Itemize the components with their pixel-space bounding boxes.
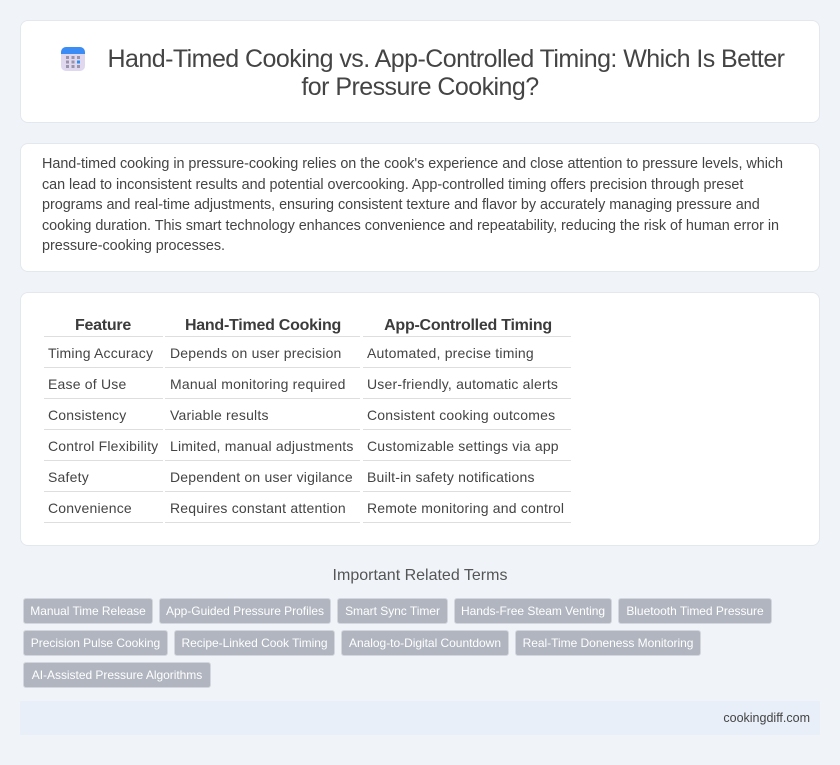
row: timing accuracy: Automated, precise timing bbox=[367, 345, 534, 361]
row: control flexibility: Limited, manual adjustments bbox=[170, 438, 354, 454]
row: timing accuracy: Timing Accuracy bbox=[48, 345, 153, 361]
intro text: pressure-cooking processes. bbox=[42, 238, 225, 254]
row: consistency bbox=[48, 407, 555, 423]
tag: Precision Pulse Cooking bbox=[31, 636, 160, 650]
intro text: can lead to inconsistent results and potential overcooking. App-controlled timing offers precision through preset bbox=[42, 176, 743, 192]
tag bbox=[23, 630, 168, 656]
intro text bbox=[42, 156, 783, 254]
row: safety: Built-in safety notifications bbox=[367, 469, 535, 485]
related terms heading: Important Related Terms bbox=[333, 567, 507, 584]
row: timing accuracy bbox=[48, 345, 534, 361]
tag: Recipe-Linked Cook Timing bbox=[182, 636, 328, 650]
intro text: Hand-timed cooking in pressure-cooking relies on the cook's experience and close attention to pressure levels, which bbox=[42, 156, 783, 172]
row: consistency: Consistency bbox=[48, 407, 126, 423]
tag: Hands-Free Steam Venting bbox=[461, 604, 605, 618]
row: consistency: Variable results bbox=[170, 407, 269, 423]
column headers: App-Controlled Timing bbox=[384, 317, 552, 334]
title: for Pressure Cooking? bbox=[301, 73, 539, 101]
column headers: Hand-Timed Cooking bbox=[185, 317, 341, 334]
footer source: cookingdiff.com bbox=[723, 711, 810, 725]
row: control flexibility bbox=[48, 438, 559, 454]
icon: calendar bbox=[61, 47, 85, 71]
tag: Bluetooth Timed Pressure bbox=[626, 604, 764, 618]
column headers bbox=[75, 317, 552, 334]
tag bbox=[341, 630, 509, 656]
tag: Analog-to-Digital Countdown bbox=[349, 636, 501, 650]
tag: Real-Time Doneness Monitoring bbox=[523, 636, 693, 650]
row: control flexibility: Customizable settings via app bbox=[367, 438, 559, 454]
row: safety bbox=[48, 469, 535, 485]
tag: AI-Assisted Pressure Algorithms bbox=[32, 668, 202, 682]
row: ease of use: Ease of Use bbox=[48, 376, 126, 392]
intro panel bbox=[20, 143, 820, 272]
tag bbox=[515, 630, 701, 656]
row: ease of use: Manual monitoring required bbox=[170, 376, 346, 392]
column headers: Feature bbox=[75, 317, 131, 334]
comparison table panel bbox=[20, 292, 820, 546]
tag bbox=[454, 598, 612, 624]
tag: Smart Sync Timer bbox=[345, 604, 440, 618]
title: Hand-Timed Cooking vs. App-Controlled Timing: Which Is Better bbox=[108, 45, 784, 73]
header panel bbox=[20, 20, 820, 123]
row: safety: Dependent on user vigilance bbox=[170, 469, 353, 485]
row: ease of use bbox=[48, 376, 558, 392]
row: convenience: Requires constant attention bbox=[170, 500, 346, 516]
tag: App-Guided Pressure Profiles bbox=[166, 604, 324, 618]
tag bbox=[174, 630, 335, 656]
intro text: cooking duration. This smart technology enhances convenience and repeatability, reducing the risk of human error in bbox=[42, 218, 779, 234]
tag bbox=[159, 598, 331, 624]
row: convenience bbox=[48, 500, 564, 516]
tag bbox=[23, 598, 153, 624]
footer bar bbox=[20, 701, 820, 735]
table bbox=[44, 317, 571, 523]
tag bbox=[337, 598, 448, 624]
tag bbox=[618, 598, 772, 624]
related terms tags bbox=[23, 598, 772, 688]
intro text: programs and real-time adjustments, ensuring consistent texture and flavor by accurately managing pressure and bbox=[42, 197, 760, 213]
tag: Manual Time Release bbox=[30, 604, 146, 618]
row: consistency: Consistent cooking outcomes bbox=[367, 407, 555, 423]
title bbox=[108, 45, 785, 101]
tag bbox=[23, 662, 211, 688]
row: convenience: Remote monitoring and control bbox=[367, 500, 564, 516]
row: control flexibility: Control Flexibility bbox=[48, 438, 158, 454]
row: timing accuracy: Depends on user precision bbox=[170, 345, 342, 361]
row: ease of use: User-friendly, automatic alerts bbox=[367, 376, 558, 392]
row: convenience: Convenience bbox=[48, 500, 132, 516]
row: safety: Safety bbox=[48, 469, 89, 485]
